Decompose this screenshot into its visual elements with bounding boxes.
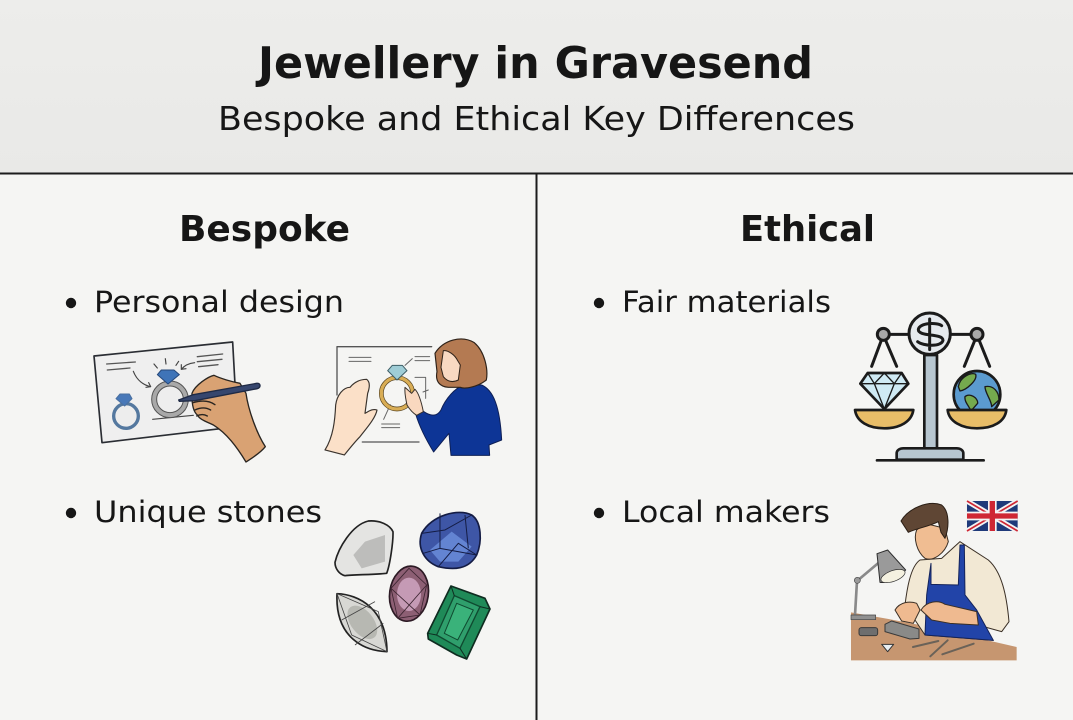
bullet: local makers: Local makers — [622, 495, 830, 529]
subtitle: Bespoke and Ethical Key Differences — [218, 99, 855, 138]
bullet: unique stones: Unique stones — [94, 495, 322, 529]
icon: woman pointing at ring design — [325, 339, 502, 455]
panel: bespoke — [66, 209, 502, 659]
heading: bespoke: Bespoke — [179, 209, 350, 250]
icon: union jack flag — [967, 501, 1018, 531]
panel: ethical — [594, 209, 1018, 660]
header band — [0, 0, 1073, 173]
heading: ethical: Ethical — [740, 209, 875, 250]
title: Jewellery in Gravesend — [255, 38, 813, 89]
icon: gemstones — [335, 512, 490, 659]
bullet: fair materials: Fair materials — [622, 285, 831, 319]
icon: hand sketching ring on paper — [94, 342, 265, 462]
icon: jeweller at workbench — [851, 501, 1018, 660]
bullet: personal design: Personal design — [94, 285, 344, 319]
icon: balance scale — [855, 313, 1006, 460]
